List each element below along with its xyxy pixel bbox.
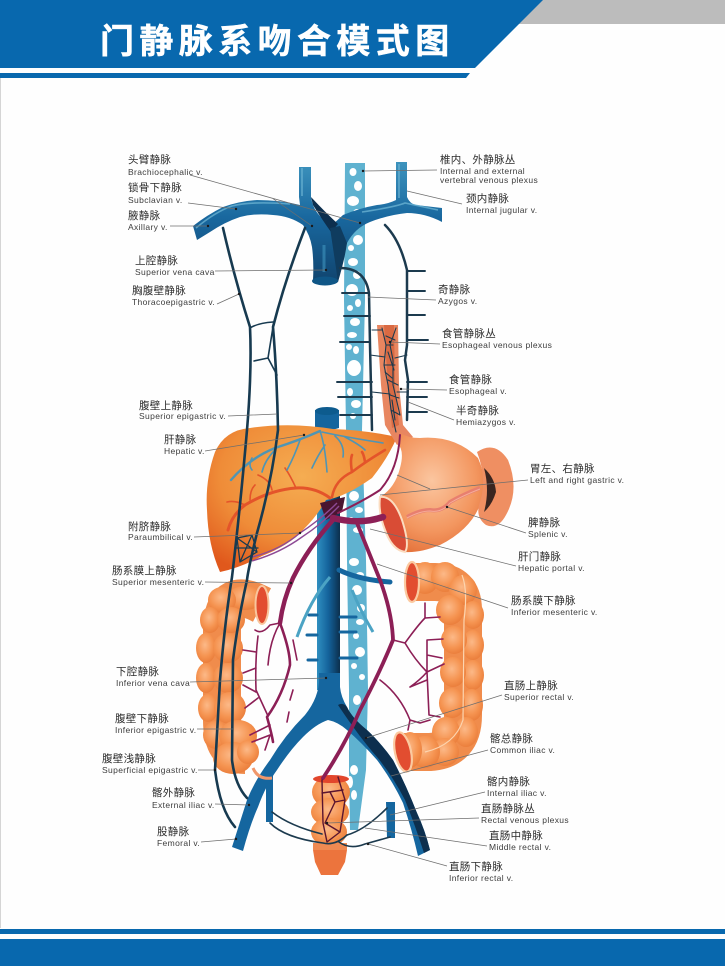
label: middle rectal: 直肠中静脉: [489, 829, 543, 842]
label: gastric: Left and right gastric v.: [530, 475, 624, 485]
right labels: [438, 153, 624, 883]
leader line dots: [207, 170, 448, 845]
label: inferior rectal: 直肠下静脉: [449, 860, 503, 873]
label: inferior epigastric: Inferior epigastric v.: [115, 725, 196, 735]
superior vena cava and brachiocephalic veins: [193, 162, 442, 286]
label: hemiazygos: [456, 404, 516, 427]
label: subclavian: Subclavian v.: [128, 195, 183, 205]
label: gastric: 胃左、右静脉: [530, 462, 595, 475]
label: inferior epigastric: 腹壁下静脉: [115, 712, 169, 725]
rectal venous plexus: [270, 777, 390, 847]
label: azygos: [438, 283, 477, 306]
label: esophageal venous plexus: 食管静脉丛: [442, 327, 496, 340]
label: femoral: [157, 825, 200, 848]
label: vertebral venous plexus: vertebral venous plexus: [440, 175, 538, 185]
label: superior vena cava: [135, 254, 215, 277]
label: internal iliac: 髂内静脉: [487, 775, 530, 788]
label: thoracoepigastric: [132, 284, 215, 307]
portal vein system: [243, 435, 444, 778]
label: esophageal: 食管静脉: [449, 373, 492, 386]
label: superior mesenteric: Superior mesenteric v.: [112, 577, 204, 587]
label: inferior epigastric: [115, 712, 196, 735]
label: inferior rectal: Inferior rectal v.: [449, 873, 513, 883]
mesenteric arcades left: [243, 623, 297, 750]
label: esophageal venous plexus: [442, 327, 552, 350]
portal branches in liver: [227, 450, 385, 530]
label: middle rectal: Middle rectal v.: [489, 842, 551, 852]
label: brachiocephalic: 头臂静脉: [128, 153, 171, 166]
label: splenic: Splenic v.: [528, 529, 568, 539]
label: femoral: 股静脉: [157, 825, 190, 838]
rectum: [311, 775, 350, 875]
label: superficial epigastric: [102, 752, 198, 775]
label: rectal venous plexus: [481, 802, 569, 825]
label: middle rectal: [489, 829, 551, 852]
label: hemiazygos: 半奇静脉: [456, 404, 499, 417]
label: internal iliac: [487, 775, 547, 798]
label: inferior mesenteric: [511, 594, 598, 617]
thoracoepigastric and epigastric veins: [215, 228, 305, 827]
label: paraumbilical: [128, 520, 193, 542]
label: rectal venous plexus: 直肠静脉丛: [481, 802, 535, 815]
label: thoracoepigastric: 胸腹壁静脉: [132, 284, 186, 297]
label: vertebral venous plexus: Internal and external: [440, 166, 525, 176]
label: hepatic portal: Hepatic portal v.: [518, 563, 585, 573]
left labels: [102, 153, 226, 848]
label: hepatic portal: 肝门静脉: [518, 550, 561, 563]
label: esophageal: [449, 373, 507, 396]
inferior vena cava: [232, 407, 430, 856]
label: superior epigastric: [139, 399, 226, 421]
azygos and hemiazygos veins: [337, 225, 428, 430]
label: brachiocephalic: Brachiocephalic v.: [128, 167, 203, 177]
label: femoral: Femoral v.: [157, 838, 200, 848]
label: common iliac: 髂总静脉: [490, 732, 533, 745]
label: esophageal: Esophageal v.: [449, 386, 507, 396]
footer bars: [0, 929, 725, 966]
label: inferior rectal: [449, 860, 513, 883]
anatomical diagram: [170, 162, 528, 875]
label: superior rectal: Superior rectal v.: [504, 692, 574, 702]
label: hepatic: [164, 433, 205, 456]
label: axillary: Axillary v.: [128, 222, 168, 232]
label: external iliac: [152, 786, 215, 810]
label: external iliac: 髂外静脉: [152, 786, 195, 799]
label: rectal venous plexus: Rectal venous plexus: [481, 815, 569, 825]
label: hepatic: 肝静脉: [164, 433, 197, 446]
leader lines: [170, 170, 528, 866]
label: subclavian: 锁骨下静脉: [128, 181, 182, 194]
label: superior vena cava: Superior vena cava: [135, 267, 215, 277]
ascending colon: [196, 586, 272, 778]
label: subclavian: [128, 181, 183, 205]
label: brachiocephalic: [128, 153, 203, 177]
descending colon: [391, 562, 484, 773]
label: superior epigastric: 腹壁上静脉: [139, 399, 193, 412]
label: superficial epigastric: 腹壁浅静脉: [102, 752, 156, 765]
label: superior rectal: [504, 679, 574, 702]
label: common iliac: [490, 732, 555, 755]
title: 门静脉系吻合模式图: [100, 23, 455, 61]
label: splenic: [528, 516, 568, 539]
label: gastric: [530, 462, 624, 485]
stomach: [380, 433, 485, 552]
label: thoracoepigastric: Thoracoepigastric v.: [132, 297, 215, 307]
label: axillary: [128, 209, 168, 232]
label: esophageal venous plexus: Esophageal venous plexus: [442, 340, 552, 350]
label: inferior mesenteric: 肠系膜下静脉: [511, 594, 576, 607]
mesenteric arcades right: [380, 603, 444, 730]
liver: [207, 425, 397, 572]
label: paraumbilical: Paraumbilical v.: [128, 532, 193, 542]
vertebral venous plexus: [344, 163, 368, 830]
label: inferior vena cava: [116, 665, 190, 688]
label: vertebral venous plexus: 椎内、外静脉丛: [440, 153, 516, 166]
label: hemiazygos: Hemiazygos v.: [456, 417, 516, 427]
label: internal jugular: [466, 192, 537, 215]
spleen: [477, 448, 514, 526]
label: azygos: Azygos v.: [438, 296, 477, 306]
label: hepatic portal: [518, 550, 585, 573]
label: axillary: 腋静脉: [128, 209, 161, 222]
label: inferior vena cava: 下腔静脉: [116, 665, 159, 678]
label: superior mesenteric: [112, 564, 204, 587]
esophagus and venous plexus: [370, 325, 413, 445]
label: paraumbilical: 附脐静脉: [128, 520, 171, 533]
label: internal jugular: 颈内静脉: [466, 192, 509, 205]
label: external iliac: External iliac v.: [152, 800, 215, 810]
label: internal jugular: Internal jugular v.: [466, 205, 537, 215]
label: inferior vena cava: Inferior vena cava: [116, 678, 190, 688]
label: superior vena cava: 上腔静脉: [135, 254, 178, 267]
hepatic veins in liver: [231, 431, 383, 480]
label: inferior mesenteric: Inferior mesenteric v.: [511, 607, 598, 617]
label: splenic: 脾静脉: [528, 516, 561, 529]
label: hepatic: Hepatic v.: [164, 446, 205, 456]
label: superficial epigastric: Superficial epigastric v.: [102, 765, 198, 775]
label: azygos: 奇静脉: [438, 283, 471, 296]
label: common iliac: Common iliac v.: [490, 745, 555, 755]
label: internal iliac: Internal iliac v.: [487, 788, 547, 798]
label: vertebral venous plexus: [440, 153, 538, 185]
label: superior mesenteric: 肠系膜上静脉: [112, 564, 177, 577]
label: superior epigastric: Superior epigastric v.: [139, 411, 226, 421]
label: superior rectal: 直肠上静脉: [504, 679, 558, 692]
